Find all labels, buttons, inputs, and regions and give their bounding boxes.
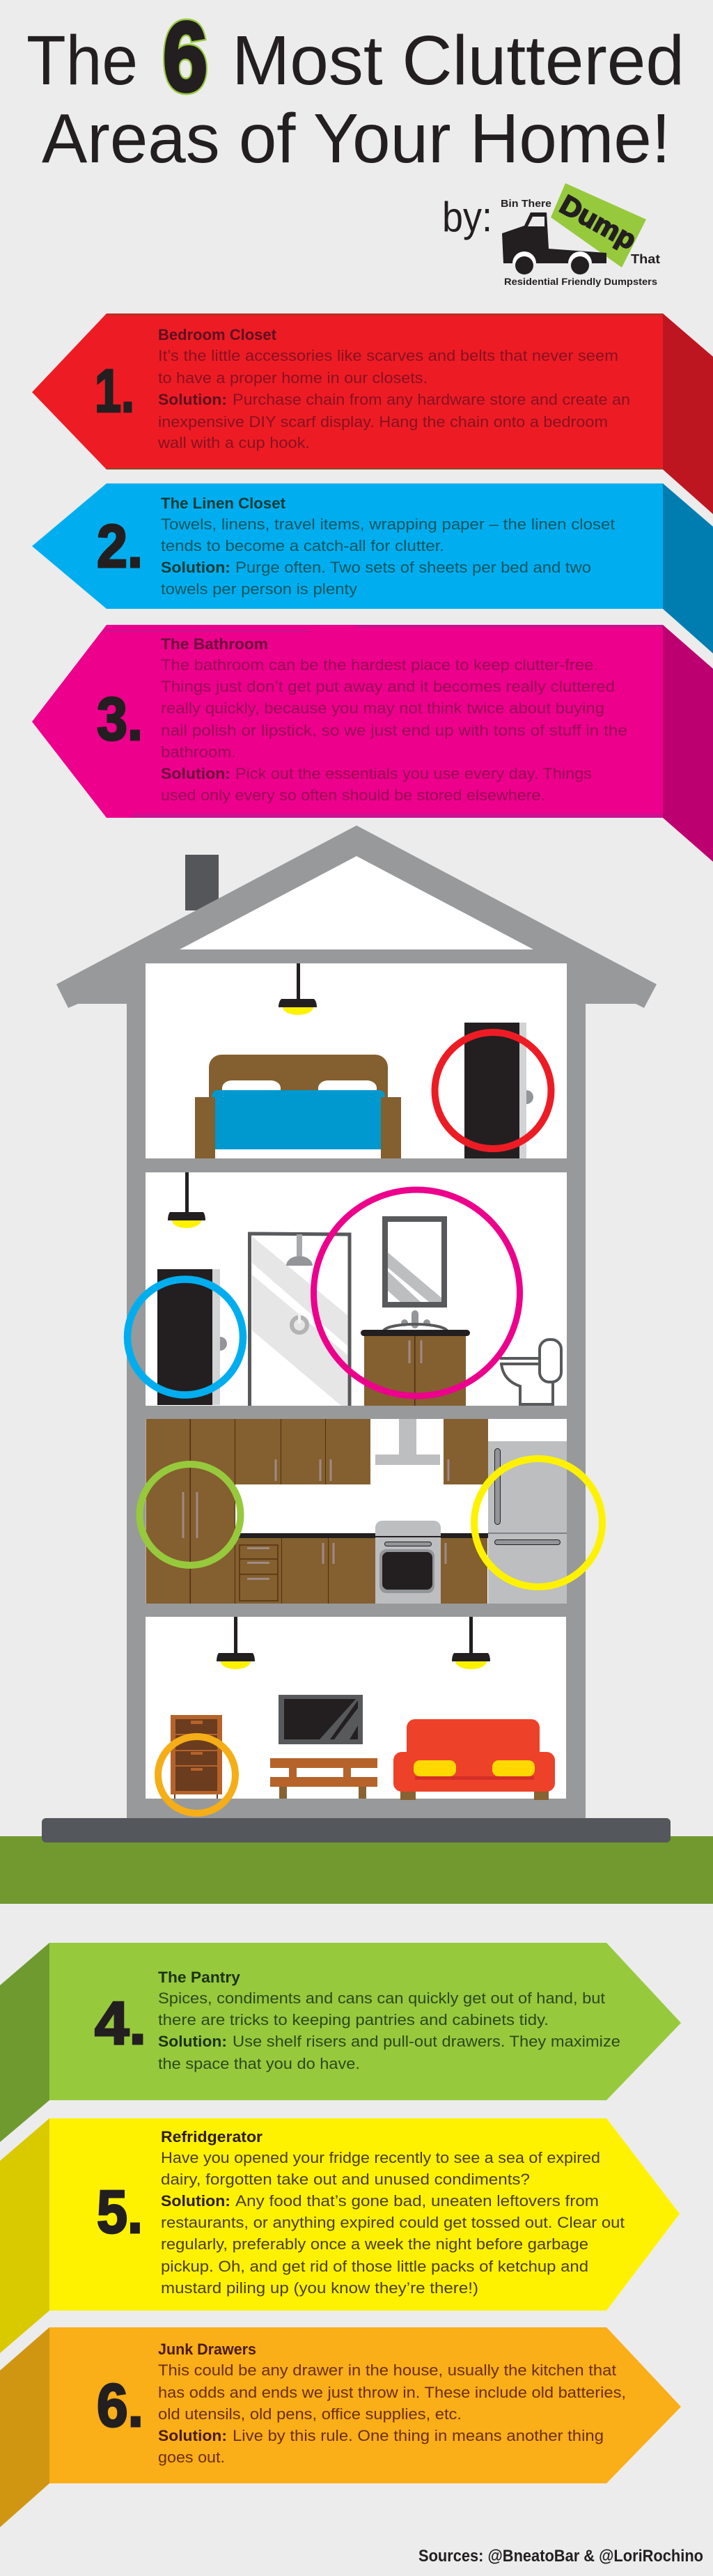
logo: Bin There Dump That [501, 183, 660, 287]
description: Spices, condiments and cans can quickly get out of hand, but [158, 1989, 605, 2007]
coffee table [270, 1758, 377, 1799]
description: Things just don’t get put away and it becomes really cluttered [161, 678, 615, 695]
heading: The Pantry [158, 1969, 241, 1986]
description: restaurants, or anything expired could get tossed out. Clear out [161, 2214, 625, 2231]
callout circle: linen closet [127, 1279, 243, 1395]
description: tends to become a catch-all for clutter. [161, 537, 444, 554]
description: inexpensive DIY scarf display. Hang the chain onto a bedroom [158, 413, 608, 430]
panel: refrigerator: 5. [97, 2178, 143, 2246]
lamp [168, 1172, 205, 1228]
hood [375, 1419, 440, 1465]
panel: linen closet [32, 483, 713, 653]
heading: Refridgerator [161, 2128, 263, 2146]
panel: bathroom: 3. [97, 685, 143, 753]
bed [195, 1055, 401, 1158]
description: regularly, preferably once a week the night before garbage [161, 2235, 588, 2253]
panel: linen closet: 2. [97, 513, 143, 580]
callout circle: pantry [139, 1464, 241, 1565]
callout circle: junk drawers [158, 1737, 235, 1813]
description: Solution: [158, 2033, 227, 2050]
description: Purge often. Two sets of sheets per bed and two [235, 559, 591, 576]
callout circle: bathroom [313, 1190, 519, 1396]
description: pickup. Oh, and get rid of those little packs of ketchup and [161, 2258, 588, 2275]
drawers [240, 1545, 278, 1601]
panel: junk drawers [0, 2327, 681, 2527]
description: old utensils, old pens, office supplies, etc. [158, 2405, 462, 2423]
byline: by: [442, 194, 492, 240]
description: to have a proper home in our closets. [158, 369, 428, 387]
big number 6: 6 [163, 1, 207, 111]
stove [375, 1521, 441, 1604]
logo: Bin There Dump That: Dump [555, 189, 641, 256]
description: there are tricks to keeping pantries and cabinets tidy. [158, 2011, 549, 2028]
fridge [488, 1441, 567, 1604]
description: wall with a cup hook. [157, 434, 310, 451]
room: kitchen [139, 1419, 602, 1604]
callout circle: refrigerator [474, 1459, 602, 1587]
heading: Bedroom Closet [158, 326, 277, 343]
cabinets [146, 1419, 488, 1604]
title: The [26, 22, 138, 100]
description [161, 515, 615, 598]
description: Solution: [161, 2192, 230, 2210]
description: has odds and ends we just throw in. These include old batteries, [158, 2384, 626, 2401]
description: really quickly, because you may not think twice about buying [161, 699, 604, 717]
description: The bathroom can be the hardest place to keep clutter-free. [161, 656, 598, 674]
dresser [171, 1715, 222, 1799]
panel: bedroom closet [32, 313, 713, 514]
toilet [500, 1340, 561, 1404]
description: dairy, forgotten take out and unused condiments? [161, 2171, 530, 2188]
lamp left [217, 1617, 255, 1669]
cabinet handles [182, 1459, 450, 1580]
description [158, 2361, 626, 2466]
description [161, 2149, 625, 2297]
room: bathroom [127, 1172, 567, 1406]
panel: bedroom closet: 1. [95, 357, 134, 425]
description: Pick out the essentials you use every day. Things [235, 765, 592, 782]
heading: The Bathroom [161, 635, 268, 653]
countertop [235, 1533, 488, 1538]
description: Have you opened your fridge recently to see a sea of expired [161, 2149, 600, 2166]
description [157, 347, 630, 451]
description: Solution: [158, 391, 227, 408]
title: Most Cluttered [232, 22, 684, 100]
television [279, 1695, 363, 1744]
description: It’s the little accessories like scarves and belts that never seem [158, 347, 618, 364]
room: bedroom [146, 963, 567, 1158]
room: living room [146, 1617, 566, 1813]
panel: pantry: 4. [95, 1989, 146, 2057]
lamp right [452, 1617, 490, 1669]
chimney [185, 855, 219, 910]
description: Purchase chain from any hardware store and create an [233, 391, 630, 408]
description [161, 656, 627, 804]
heading: Junk Drawers [158, 2341, 256, 2358]
house frame [56, 825, 657, 1818]
description: nail polish or lipstick, so we just end up with tons of stuff in the [161, 722, 627, 739]
description: used only every so often should be stored elsewhere. [161, 786, 545, 804]
description: Solution: [161, 765, 230, 782]
description [158, 1989, 620, 2072]
description: Solution: [161, 559, 230, 576]
house cross-section [42, 825, 671, 1842]
description: Live by this rule. One thing in means another thing [233, 2427, 604, 2444]
mirror [385, 1219, 444, 1305]
logo: Bin There Dump That: Bin There [501, 198, 551, 210]
sink and vanity [361, 1310, 470, 1406]
couch [393, 1719, 555, 1800]
description: towels per person is plenty [161, 580, 357, 598]
big number 6: 6 [163, 1, 207, 111]
panel: junk drawers: 6. [97, 2372, 143, 2439]
description: This could be any drawer in the house, usually the kitchen that [158, 2361, 616, 2379]
logo: Bin There Dump That: That [631, 252, 660, 266]
description: the space that you do have. [158, 2055, 360, 2072]
title: Areas of Your Home! [42, 100, 671, 178]
description: Towels, linens, travel items, wrapping paper – the linen closet [161, 515, 615, 533]
lamp [279, 963, 317, 1015]
title [26, 1, 684, 178]
shower [249, 1234, 350, 1406]
description: Solution: [158, 2427, 227, 2444]
panel: refrigerator [0, 2118, 680, 2353]
foundation [42, 1818, 671, 1842]
door [157, 1269, 227, 1405]
description: mustard piling up (you know they’re there!) [161, 2279, 478, 2297]
panel: pantry [0, 1943, 681, 2142]
description: bathroom. [161, 743, 236, 761]
description: goes out. [158, 2449, 225, 2466]
description: Use shelf risers and pull-out drawers. They maximize [233, 2033, 620, 2050]
panel: bathroom [32, 625, 713, 862]
door [464, 1023, 533, 1158]
callout circle: bedroom closet [434, 1032, 551, 1149]
attic [180, 856, 533, 949]
logo: Bin There Dump That: Residential Friendly Dumpsters [504, 276, 657, 287]
heading: The Linen Closet [161, 495, 286, 512]
description: Any food that’s gone bad, uneaten leftovers from [235, 2192, 599, 2210]
grass [0, 1836, 713, 1904]
